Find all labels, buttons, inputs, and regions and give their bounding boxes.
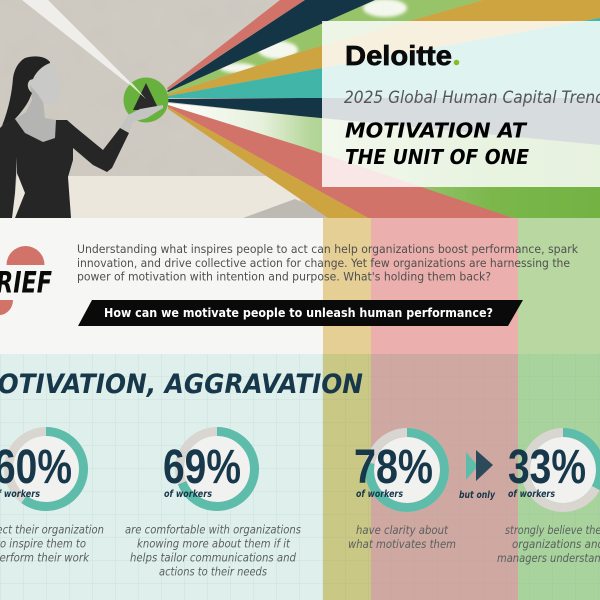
stat: 69%: 69% bbox=[163, 441, 241, 494]
stat: 69%: of workers bbox=[164, 489, 212, 500]
hair bbox=[2, 56, 50, 126]
neck and chest bbox=[14, 85, 56, 143]
navy beam middle bbox=[168, 98, 600, 145]
brief logo bbox=[0, 246, 52, 315]
stripe: pink intro bbox=[371, 218, 518, 354]
stat: 69%: are comfortable with organizations bbox=[125, 522, 301, 536]
yellow beam upper bbox=[168, 0, 600, 96]
question banner: How can we motivate people to unleash human performance? bbox=[104, 305, 493, 320]
deloitte logo: Deloitte bbox=[345, 40, 452, 71]
title: MOTIVATION AT bbox=[345, 118, 528, 142]
intro paragraph: power of motivation with intention and purpose. What's holding them back? bbox=[77, 270, 491, 284]
title: THE UNIT OF ONE bbox=[345, 145, 529, 169]
title panel bbox=[322, 21, 600, 187]
white light beam bbox=[22, 0, 131, 85]
hero illustration bbox=[0, 0, 600, 218]
pyramid bbox=[133, 83, 159, 110]
wall texture bbox=[0, 0, 330, 180]
green circle bbox=[124, 78, 168, 122]
arrow: but only: but only bbox=[459, 490, 495, 501]
stat: 78%: 78% bbox=[354, 441, 433, 494]
salmon beam top bbox=[167, 0, 305, 90]
lower sky beam bbox=[168, 103, 600, 218]
stat: 33%: of workers bbox=[508, 489, 555, 500]
stripe: yellow intro bbox=[323, 218, 371, 354]
hand bbox=[120, 105, 163, 133]
upper sky beam bbox=[168, 0, 483, 94]
intro paragraph: Understanding what inspires people to act can help organizations boost performance, spark bbox=[77, 242, 578, 256]
intro paragraph: innovation, and drive collective action for change. Yet few organizations are harnessing the bbox=[77, 256, 570, 270]
stat: 69% bbox=[125, 432, 301, 578]
black top bbox=[0, 119, 129, 218]
yellow beam lower bbox=[168, 107, 368, 218]
stats panel background bbox=[0, 354, 600, 600]
stat: 69%: actions to their needs bbox=[159, 564, 267, 578]
stat: 69%: helps tailor communications and bbox=[130, 550, 297, 564]
floor shadow bbox=[244, 199, 328, 218]
salmon beam lower bbox=[168, 105, 513, 218]
clouds bbox=[220, 0, 407, 73]
light ray on circle bbox=[128, 83, 146, 99]
face bbox=[36, 92, 44, 102]
stat: 69%: knowing more about them if it bbox=[137, 536, 290, 550]
stat: 78% bbox=[348, 432, 456, 551]
woman bbox=[0, 56, 163, 218]
stat: 78%: have clarity about bbox=[356, 523, 448, 537]
floor bbox=[12, 176, 300, 218]
stat: 60% bbox=[0, 432, 104, 564]
stat: 33% bbox=[497, 432, 600, 565]
intro paragraph bbox=[77, 242, 578, 284]
stat: 78%: what motivates them bbox=[348, 537, 456, 551]
navy beam top bbox=[167, 0, 375, 92]
stripe: green intro bbox=[518, 218, 600, 354]
title bbox=[345, 118, 529, 169]
concrete wall bbox=[0, 0, 600, 218]
stat: 78%: of workers bbox=[356, 489, 403, 500]
question banner bbox=[78, 300, 523, 326]
teal beam bbox=[168, 18, 600, 98]
arrow: but only bbox=[459, 450, 495, 501]
